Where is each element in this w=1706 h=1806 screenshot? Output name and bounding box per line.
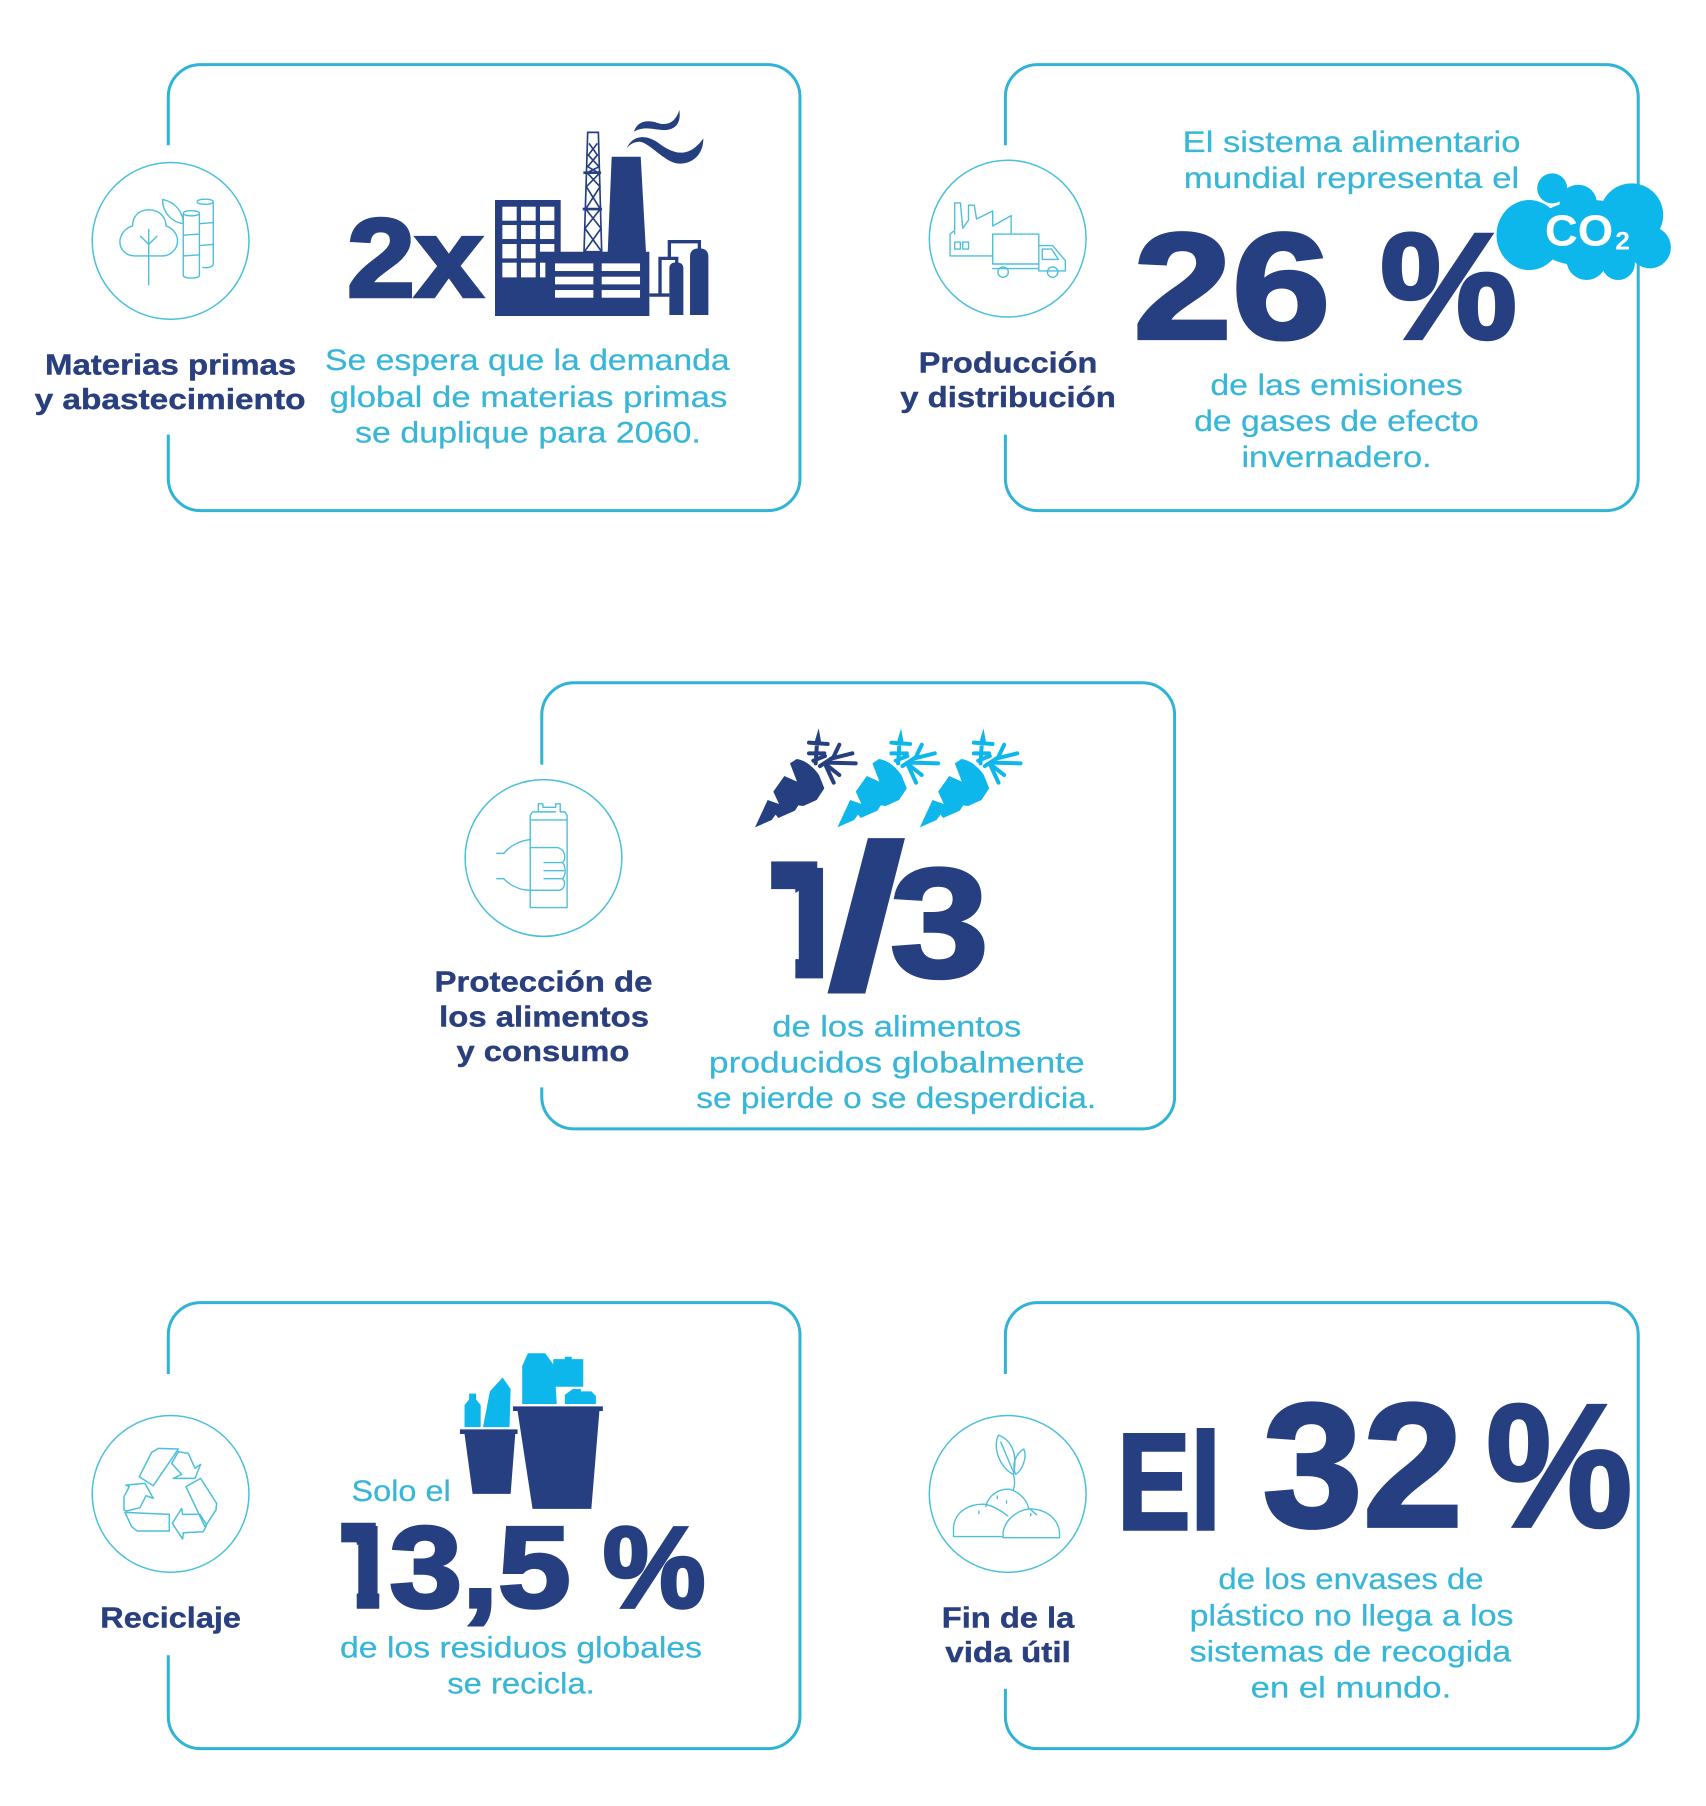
description text: de los envases de <box>1218 1563 1484 1596</box>
description text: de los alimentos <box>772 1011 1021 1044</box>
panel: protección de los alimentos y consumo <box>435 683 1175 1129</box>
description text <box>696 1011 1096 1115</box>
description text: de las emisiones <box>1210 369 1463 402</box>
panel: fin de la vida útil <box>929 1303 1638 1749</box>
description text: se recicla. <box>447 1667 595 1700</box>
big stat: 1/3: / <box>828 804 905 1032</box>
heading: vida útil <box>945 1637 1071 1669</box>
description text: de los residuos globales <box>340 1632 702 1665</box>
panel: reciclaje <box>92 1303 800 1749</box>
icon: recycling bins <box>460 1353 603 1509</box>
icon: carrot light 1 <box>837 728 938 827</box>
intro text: El sistema alimentario <box>1183 126 1520 159</box>
description text: global de materias primas <box>330 381 727 414</box>
big stat: El 32 % <box>1117 1367 1632 1564</box>
heading: y consumo <box>456 1036 629 1068</box>
panel border <box>542 683 1175 1129</box>
icon: factory <box>495 110 708 316</box>
heading: los alimentos <box>439 1001 649 1033</box>
icon: factory and truck <box>929 160 1086 317</box>
panel: producción y distribución <box>900 65 1671 511</box>
description text <box>1190 1563 1513 1704</box>
panel border <box>168 65 800 511</box>
intro text: Solo el <box>352 1475 451 1508</box>
description text: en el mundo. <box>1251 1671 1451 1704</box>
big stat: El 32 %: El <box>1117 1406 1221 1559</box>
description text: invernadero. <box>1241 441 1432 474</box>
description text <box>340 1632 702 1700</box>
description text: de gases de efecto <box>1194 405 1479 438</box>
panel border <box>168 1303 800 1749</box>
icon: carrot dark <box>755 728 856 827</box>
heading: y abastecimiento <box>35 384 305 416</box>
big stat: 26 % <box>1133 201 1517 370</box>
panel border <box>1005 1303 1638 1749</box>
heading: Fin de la <box>942 1603 1075 1635</box>
intro text <box>1183 126 1520 195</box>
heading: Reciclaje <box>100 1603 241 1635</box>
big stat: 1/3: 1 <box>764 836 851 1010</box>
big stat: El 32 %: % <box>1486 1368 1632 1564</box>
icon: recycle symbol <box>92 1416 249 1572</box>
heading: Protección de <box>435 967 652 999</box>
description text: se duplique para 2060. <box>355 417 701 450</box>
icon: CO2 cloud: 2 <box>1615 227 1630 255</box>
intro text: mundial representa el <box>1184 162 1519 195</box>
big stat: 2x: 2x <box>347 195 483 320</box>
description text <box>325 344 730 450</box>
panel border <box>1005 65 1638 511</box>
big stat: 13,5 % <box>341 1522 704 1626</box>
big stat: El 32 %: 32 <box>1262 1367 1463 1564</box>
big stat: 13,5 %: 3,5 <box>390 1504 571 1632</box>
icon: CO2 cloud: CO <box>1545 207 1613 256</box>
big stat: 1/3: 3 <box>890 836 989 1010</box>
description text: plástico no llega a los <box>1190 1599 1513 1632</box>
icon: sprout and fruit mounds <box>929 1416 1086 1572</box>
heading: y distribución <box>900 382 1116 414</box>
big stat: 1/3 <box>771 838 985 994</box>
heading: Producción <box>919 347 1097 379</box>
description text: Se espera que la demanda <box>325 344 730 377</box>
big stat: 13,5 %: 1 <box>333 1504 397 1632</box>
icon: CO2 cloud <box>1497 173 1671 280</box>
heading: Materias primas <box>45 350 296 382</box>
icon: carrot light 2 <box>920 728 1021 827</box>
description text: producidos globalmente <box>709 1046 1085 1079</box>
description text <box>1194 369 1479 474</box>
heading <box>900 347 1116 414</box>
description text: se pierde o se desperdicia. <box>696 1082 1096 1115</box>
big stat: 26 %: 26 <box>1133 201 1330 370</box>
heading <box>35 350 305 416</box>
description text: sistemas de recogida <box>1190 1636 1512 1669</box>
heading <box>942 1603 1075 1669</box>
big stat: 26 %: % <box>1380 201 1517 370</box>
icon: tree, leaf and bamboo <box>92 163 249 319</box>
panel: materias primas y abastecimiento <box>35 65 800 511</box>
heading <box>435 967 652 1068</box>
icon: hand holding bottle <box>465 780 622 936</box>
big stat: 13,5 %: % <box>603 1504 705 1632</box>
